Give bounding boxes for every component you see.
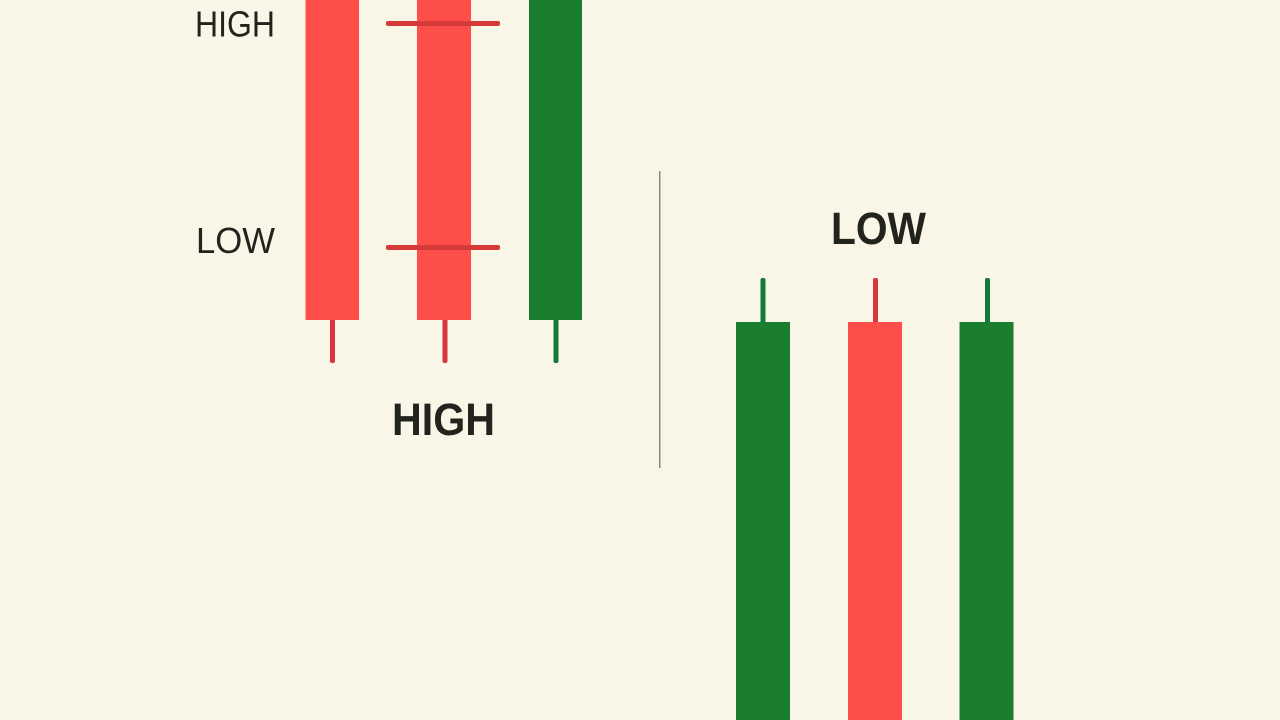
candle: green left [736,278,790,720]
level line: high [386,21,500,26]
candle: red middle [848,278,902,720]
heading: LOW: LOW [831,203,926,254]
panel: low candles [736,203,1014,720]
candle: red middle [417,0,471,363]
label: LOW level: LOW [196,220,276,261]
level line: low [386,245,500,250]
candle: green right [960,278,1014,720]
heading: HIGH: HIGH [392,394,495,445]
panel: high candles [195,0,582,445]
candle: red left [306,0,359,363]
label: HIGH level: HIGH [195,4,275,44]
vertical divider [659,171,660,468]
candle: green right [529,0,582,363]
